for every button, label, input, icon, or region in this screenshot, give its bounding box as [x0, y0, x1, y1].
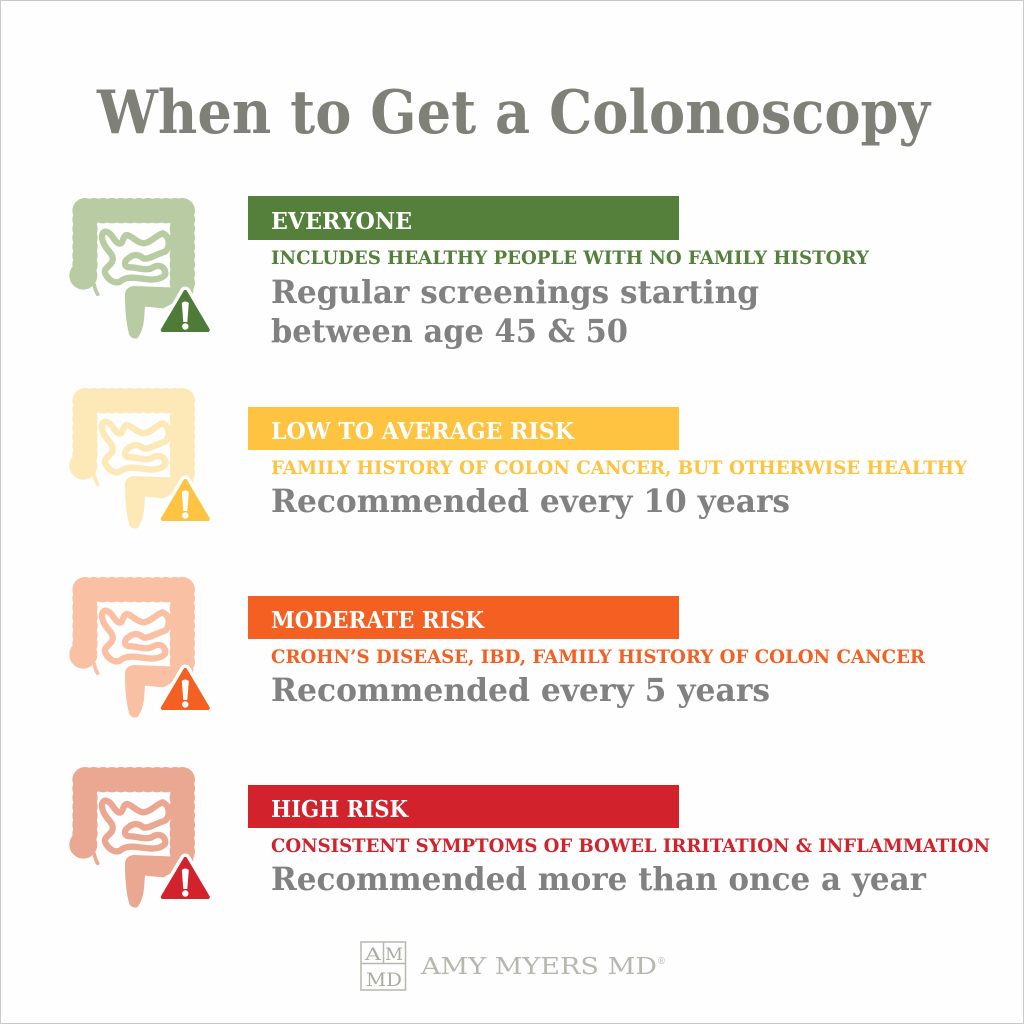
title: When to Get a Colonoscopy	[96, 78, 932, 148]
logo mark: MD	[366, 969, 402, 991]
recommendation: between age 45 & 50	[271, 312, 628, 350]
icon: orange intestine with warning	[69, 590, 208, 718]
recommendation: Recommended every 5 years	[271, 671, 770, 709]
subheading: CONSISTENT SYMPTOMS OF BOWEL IRRITATION & INFLAMMATION	[271, 836, 990, 857]
heading bar	[248, 596, 679, 639]
heading bar	[248, 785, 679, 828]
registered mark: ®	[657, 957, 666, 967]
icon: yellow intestine with warning	[69, 401, 208, 529]
logo mark	[361, 942, 406, 991]
icon: green intestine with warning	[69, 211, 208, 339]
logo	[361, 942, 666, 991]
heading: HIGH RISK	[271, 796, 409, 823]
heading bar	[248, 196, 679, 240]
logo wordmark: AMY MYERS MD	[420, 954, 657, 980]
subheading: INCLUDES HEALTHY PEOPLE WITH NO FAMILY HISTORY	[271, 248, 870, 269]
panel: high risk	[248, 785, 990, 898]
logo mark: A	[364, 945, 382, 965]
heading: MODERATE RISK	[271, 607, 485, 634]
logo mark: M	[385, 945, 403, 965]
panel: moderate risk	[248, 596, 926, 709]
subheading: CROHN’S DISEASE, IBD, FAMILY HISTORY OF COLON CANCER	[271, 647, 926, 668]
panel: low to average risk	[248, 407, 968, 520]
heading: LOW TO AVERAGE RISK	[271, 418, 575, 445]
recommendation: Recommended every 10 years	[271, 482, 790, 520]
recommendation: Recommended more than once a year	[271, 860, 927, 898]
panel: everyone	[248, 196, 870, 350]
recommendation	[271, 273, 759, 350]
icon: red intestine with warning	[69, 780, 208, 908]
subheading: FAMILY HISTORY OF COLON CANCER, BUT OTHERWISE HEALTHY	[271, 458, 968, 479]
heading bar	[248, 407, 679, 450]
recommendation: Regular screenings starting	[271, 273, 759, 311]
heading: EVERYONE	[271, 208, 412, 235]
